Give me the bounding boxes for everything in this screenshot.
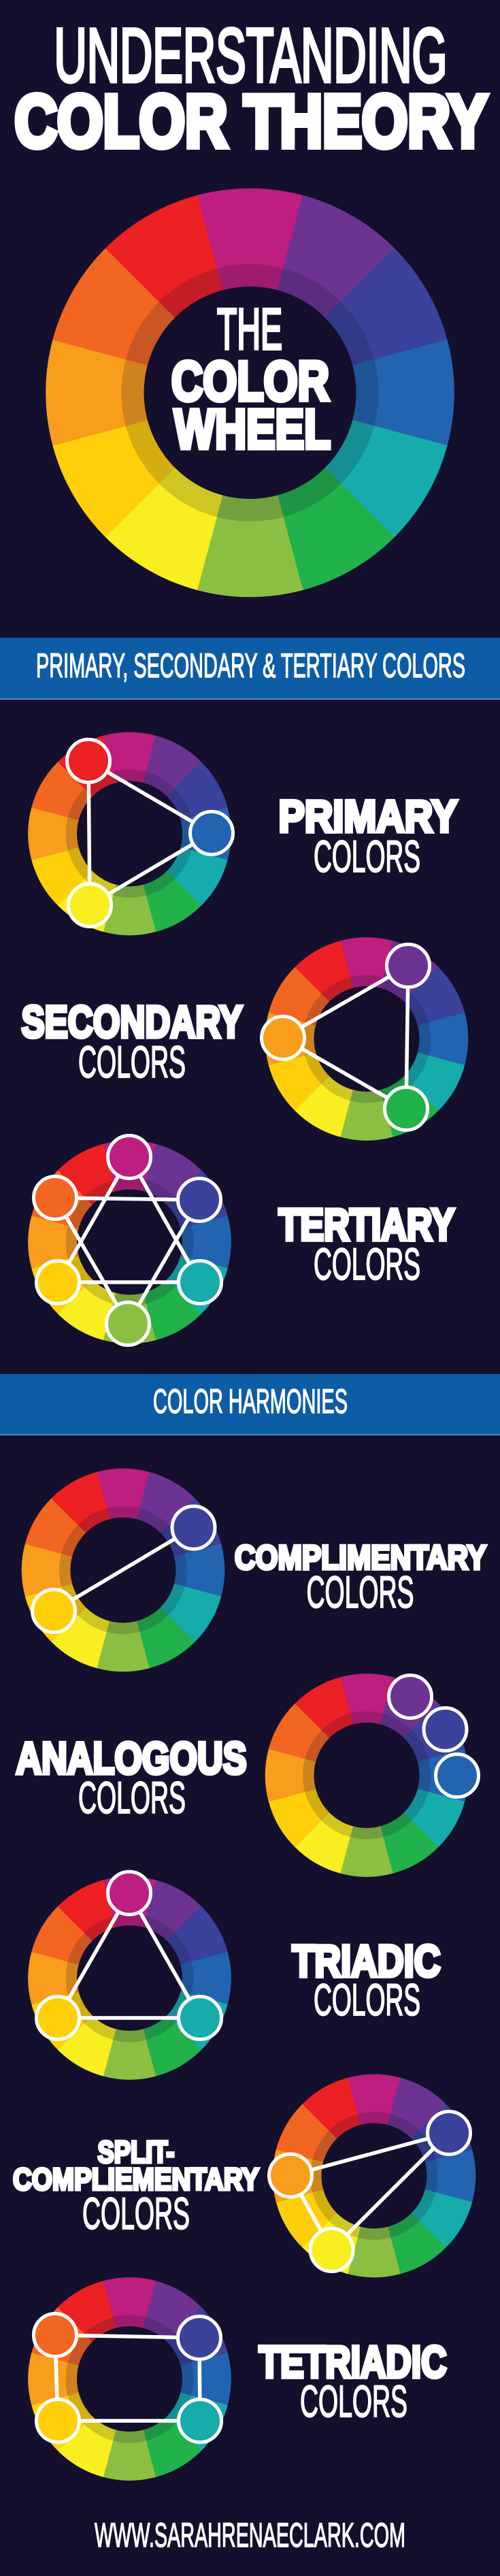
banner: primary, secondary and tertiary colors <box>0 638 500 700</box>
label: secondary colors: COLORS <box>78 1037 186 1087</box>
label: triadic colors: COLORS <box>314 1974 420 2025</box>
label: triadic colors: TRIADIC <box>293 1936 441 1986</box>
panel: triadic colors wheel <box>28 1872 231 2080</box>
label: primary colors: PRIMARY <box>279 791 457 841</box>
label: tertiary colors: TERTIARY <box>279 1199 454 1250</box>
label: split-compliementary colors: SPLIT- <box>98 2134 174 2170</box>
label: tertiary colors: COLORS <box>314 1239 420 1289</box>
label: complimentary colors: COLORS <box>306 1567 414 1617</box>
label: tetriadic colors: TETRIADIC <box>259 2336 446 2387</box>
main color wheel <box>46 189 454 597</box>
label: analogous colors <box>16 1733 246 1823</box>
label: primary colors <box>279 791 457 881</box>
label: triadic colors <box>293 1936 441 2025</box>
panel: primary colors wheel <box>28 732 233 935</box>
label: analogous colors: ANALOGOUS <box>16 1733 246 1783</box>
label: tetriadic colors: COLORS <box>300 2376 407 2426</box>
label: secondary colors <box>22 996 242 1087</box>
panel: secondary colors wheel <box>261 937 468 1141</box>
banner: color harmonies <box>0 1374 500 1435</box>
panel: tetriadic colors wheel <box>28 2277 231 2481</box>
label: split-compliementary colors: COMPLIEMENTARY <box>13 2162 259 2197</box>
label: analogous colors: COLORS <box>78 1772 186 1823</box>
label: secondary colors: SECONDARY <box>22 996 242 1047</box>
wheel label: the color wheel: WHEEL <box>174 399 331 460</box>
wheel label: the color wheel: THE <box>217 297 282 362</box>
panel: tertiary colors wheel <box>28 1135 231 1345</box>
title <box>15 13 487 163</box>
label: split-compliementary colors: COLORS <box>82 2188 190 2238</box>
banner: color harmonies: COLOR HARMONIES <box>153 1382 348 1420</box>
label: primary colors: COLORS <box>314 831 420 881</box>
label: split-compliementary colors <box>13 2134 259 2238</box>
wheel label: the color wheel: COLOR <box>171 350 329 412</box>
label: complimentary colors <box>235 1538 486 1617</box>
label: tetriadic colors <box>259 2336 446 2426</box>
panel: complimentary colors wheel <box>22 1469 224 1672</box>
panel: split-complementary colors wheel <box>269 2074 476 2277</box>
wheel label: the color wheel <box>171 297 331 460</box>
label: tertiary colors <box>279 1199 454 1289</box>
panel: analogous colors wheel <box>265 1674 479 1877</box>
